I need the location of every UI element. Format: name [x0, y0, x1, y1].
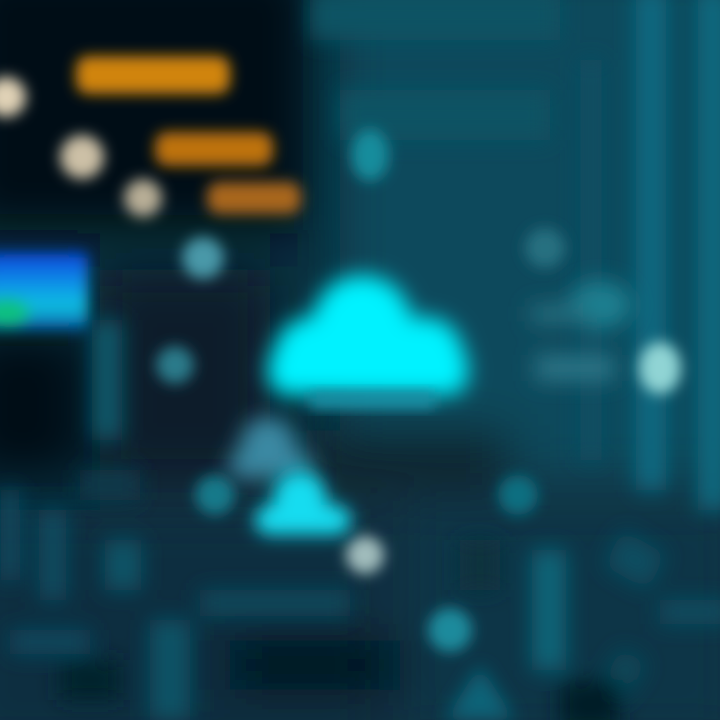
large cyan cloud — [268, 275, 468, 395]
bar 3 — [207, 182, 301, 214]
bar 1 — [76, 56, 230, 94]
dot 2 — [60, 135, 104, 179]
dot 6 — [351, 129, 389, 181]
dot 3 — [124, 179, 162, 217]
dot 1 — [0, 77, 26, 117]
dot 4 — [182, 237, 224, 279]
dot 11 — [195, 475, 235, 515]
dot 10 — [525, 228, 565, 268]
bar 2 — [155, 132, 273, 166]
cloud base shadow glow — [310, 392, 435, 408]
green glow on blue screen — [0, 298, 30, 326]
panel: blue screen — [0, 252, 88, 330]
dot 5 — [156, 346, 194, 384]
bottom triangular shape — [445, 665, 515, 720]
dot 9 — [428, 608, 472, 652]
pale cloud behind — [228, 417, 312, 478]
dot 12 — [498, 475, 538, 515]
small cyan cloud — [255, 471, 351, 535]
timeline dots — [0, 77, 681, 652]
orange bars — [76, 56, 301, 214]
dot 7 — [639, 342, 681, 394]
faint right cloud — [530, 281, 632, 381]
dot 8 — [346, 536, 384, 574]
